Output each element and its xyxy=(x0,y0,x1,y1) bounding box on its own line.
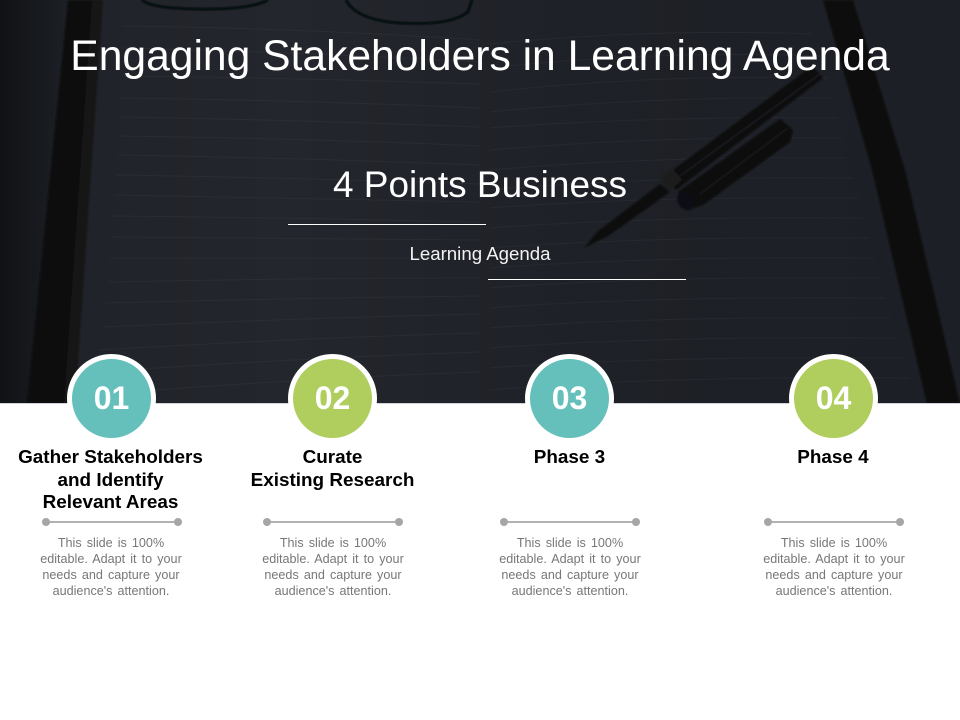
body text 4: needs and capture your xyxy=(765,568,903,582)
body text 2 xyxy=(262,536,404,598)
body text 3 xyxy=(499,536,641,598)
heading 1: Relevant Areas xyxy=(43,492,178,513)
body text 2: editable. Adapt it to your xyxy=(262,552,404,566)
heading 2 xyxy=(251,447,414,490)
background: dark notebook photo xyxy=(0,0,960,403)
body text 3: needs and capture your xyxy=(501,568,639,582)
heading 1: Gather Stakeholders xyxy=(18,447,203,468)
white lower section xyxy=(0,403,960,720)
body text 1: editable. Adapt it to your xyxy=(40,552,182,566)
number badge 01: 01 xyxy=(94,380,129,416)
number badge 02 xyxy=(288,354,377,443)
right strap xyxy=(823,0,960,404)
subtitle: 4 Points Business xyxy=(333,164,627,205)
glasses xyxy=(142,0,472,24)
heading 1: and Identify xyxy=(57,470,164,490)
heading 3: Phase 3 xyxy=(534,447,605,468)
body text 1: needs and capture your xyxy=(42,568,180,582)
number badge 02: 02 xyxy=(315,380,350,416)
body text 2: needs and capture your xyxy=(264,568,402,582)
body text 4: This slide is 100% xyxy=(781,536,887,550)
body text 1: This slide is 100% xyxy=(58,536,164,550)
body text 3: This slide is 100% xyxy=(517,536,623,550)
body text 4: audience's attention. xyxy=(776,584,892,598)
body text 2: audience's attention. xyxy=(275,584,391,598)
body text 3: editable. Adapt it to your xyxy=(499,552,641,566)
subtitle rule top xyxy=(288,224,486,225)
pen cap xyxy=(673,119,793,214)
heading 4: Phase 4 xyxy=(797,447,869,468)
heading 2: Curate xyxy=(303,447,362,468)
divider 3 xyxy=(500,518,640,526)
body text 2: This slide is 100% xyxy=(280,536,386,550)
number badge 04: 04 xyxy=(816,380,851,416)
body text 1: audience's attention. xyxy=(53,584,169,598)
number badge 03 xyxy=(525,354,614,443)
number badge 03: 03 xyxy=(552,380,587,416)
body text 4 xyxy=(763,536,905,598)
body text 3: audience's attention. xyxy=(512,584,628,598)
body text 1 xyxy=(40,536,182,598)
title: Engaging Stakeholders in Learning Agenda xyxy=(70,32,890,80)
divider 2 xyxy=(263,518,403,526)
pen xyxy=(584,66,823,248)
caption: Learning Agenda xyxy=(409,243,551,264)
left strap xyxy=(27,0,103,404)
body text 4: editable. Adapt it to your xyxy=(763,552,905,566)
heading 2: Existing Research xyxy=(251,470,414,490)
number badge 04 xyxy=(789,354,878,443)
number badge 01 xyxy=(67,354,156,443)
divider 4 xyxy=(764,518,904,526)
divider 1 xyxy=(42,518,182,526)
heading 1 xyxy=(18,447,203,513)
subtitle rule bottom xyxy=(488,279,686,280)
